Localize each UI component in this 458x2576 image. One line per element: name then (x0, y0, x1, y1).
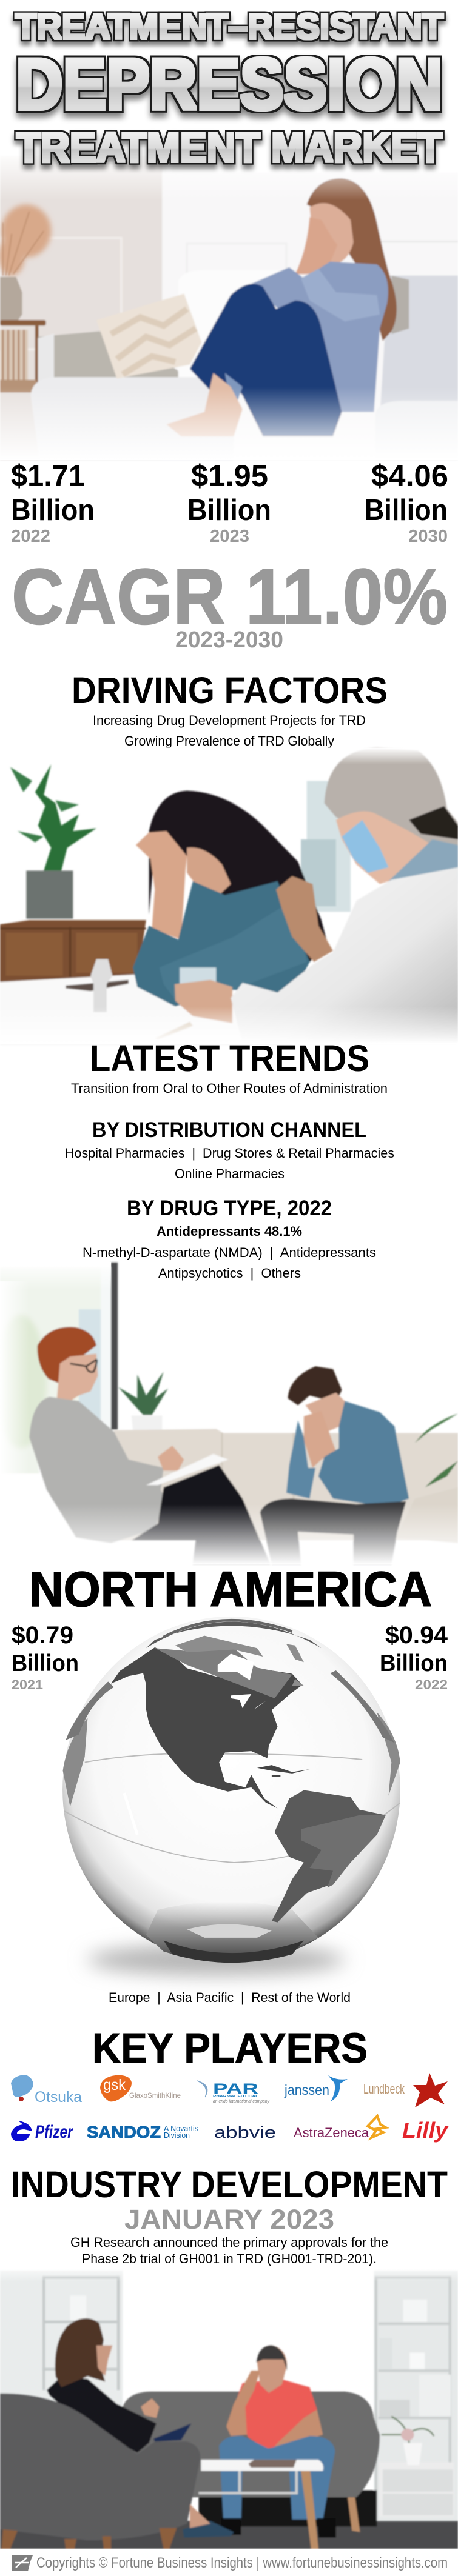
sofa (114, 1429, 458, 1540)
armchair (0, 2394, 200, 2540)
by drug type: Antipsychotics | Others (158, 1266, 301, 1281)
title: TREATMENT MARKET (16, 124, 442, 171)
sofa (38, 331, 181, 390)
by distribution channel (65, 1118, 394, 1181)
photo: therapy session with man in red shirt (0, 2262, 458, 2549)
south america continent (272, 1790, 386, 1923)
industry development: Phase 2b trial of GH001 in TRD (GH001-TRD-201). (82, 2251, 377, 2266)
equator lines (64, 1753, 400, 1863)
north america stats 2021 (12, 1622, 79, 1692)
logo: lundbeck: Lundbeck (363, 2081, 405, 2097)
caribbean islands (257, 1765, 309, 1777)
globe (62, 1617, 400, 1975)
logo: janssen (284, 2075, 348, 2101)
stat 2023: Billion (187, 494, 271, 527)
logo: otsuka: Otsuka (35, 2089, 82, 2106)
driving factors: Increasing Drug Development Projects for TRD (93, 713, 366, 728)
stat 2022: $1.71 (11, 459, 85, 493)
photo: therapist with male patient on sofa (0, 1262, 458, 1565)
therapist (35, 1449, 175, 1549)
market value stats (11, 459, 448, 546)
logo: par (197, 2081, 270, 2104)
logo: red star (413, 2073, 448, 2107)
coffee table (201, 2460, 323, 2471)
industry development: GH Research announced the primary approvals for the (70, 2235, 388, 2250)
logo: janssen: janssen (284, 2082, 329, 2098)
driving factors: DRIVING FACTORS (72, 670, 388, 711)
key players heading: KEY PLAYERS (92, 2024, 368, 2072)
north america stats 2022: Billion (380, 1650, 448, 1677)
logo: gsk: gsk (103, 2077, 126, 2094)
latest trends (71, 1038, 388, 1096)
latest trends: LATEST TRENDS (90, 1038, 369, 1079)
globe shadow (87, 1944, 345, 1975)
footer logo (12, 2555, 33, 2571)
logo: sandoz: A Novartis (164, 2124, 198, 2133)
stat 2022: 2022 (11, 527, 50, 546)
stat 2023: 2023 (210, 527, 249, 546)
by drug type: BY DRUG TYPE, 2022 (127, 1196, 332, 1220)
by distribution channel: BY DISTRIBUTION CHANNEL (92, 1118, 366, 1142)
by distribution channel: Online Pharmacies (175, 1166, 285, 1181)
stat 2030: 2030 (408, 527, 448, 546)
patient (149, 791, 327, 962)
logo: gsk: GlaxoSmithKline (129, 2091, 181, 2100)
industry development: JANUARY 2023 (124, 2204, 334, 2235)
logos (11, 2073, 449, 2143)
north america stats 2022: 2022 (415, 1677, 448, 1692)
industry development (11, 2164, 448, 2266)
by drug type (83, 1196, 376, 1281)
sofa (123, 2392, 380, 2497)
logo: lilly: Lilly (402, 2118, 449, 2143)
photo: woman sitting on sofa covering face (0, 150, 458, 460)
north america stats 2022: $0.94 (385, 1622, 448, 1649)
woman (307, 178, 397, 341)
stat 2030: $4.06 (371, 459, 448, 493)
by drug type: N-methyl-D-aspartate (NMDA) | Antidepressants (83, 1245, 376, 1260)
logo: sandoz (87, 2123, 198, 2141)
driving factors: Growing Prevalence of TRD Globally (124, 733, 334, 749)
logo: par: PHARMACEUTICAL (213, 2095, 258, 2098)
globe base (146, 1901, 318, 1960)
logo: pfizer: Pfizer (35, 2122, 74, 2142)
north america stats 2021: $0.79 (12, 1622, 73, 1649)
logo: par: PAR (213, 2081, 258, 2097)
therapist (47, 2376, 157, 2453)
logo: sandoz: Division (164, 2131, 190, 2140)
stat 2022: Billion (11, 494, 95, 527)
stat 2023: $1.95 (191, 459, 268, 493)
north america stats 2021: Billion (12, 1650, 79, 1677)
CAGR: 2023-2030 (175, 627, 283, 653)
table (0, 975, 292, 1046)
footer (0, 2549, 458, 2576)
hudson bay and great lakes (218, 1653, 266, 1709)
male patient (288, 1366, 342, 1405)
by distribution channel: Hospital Pharmacies | Drug Stores & Retail Pharmacies (65, 1146, 394, 1161)
wall plant (118, 1372, 168, 1415)
arctic islands (175, 1636, 304, 1686)
photo: doctor comforting patient (0, 747, 458, 1046)
dried flowers (0, 205, 51, 276)
driving factors (72, 670, 388, 749)
logo: sandoz: SANDOZ (87, 2123, 161, 2141)
north america stats 2022 (380, 1622, 448, 1692)
title (15, 7, 443, 171)
doctor (325, 747, 458, 901)
logo: astrazeneca (294, 2116, 386, 2140)
dresser (0, 920, 146, 982)
logo: gsk (100, 2075, 181, 2101)
logo: astrazeneca: AstraZeneca (294, 2125, 369, 2140)
dresser (379, 2463, 454, 2517)
shelves (42, 2276, 118, 2390)
other regions: Europe | Asia Pacific | Rest of the World (109, 1990, 351, 2005)
stat 2030: Billion (365, 494, 448, 527)
stat 2023 (187, 459, 271, 546)
title: TREATMENT–RESISTANT (15, 7, 443, 47)
by drug type: Antidepressants 48.1% (157, 1224, 302, 1239)
stat 2030 (365, 459, 448, 546)
north america continent (111, 1647, 302, 1808)
floor (0, 2521, 458, 2549)
north america heading: NORTH AMERICA (29, 1562, 432, 1617)
stat 2022 (11, 459, 95, 546)
logo: par: an endo international company (213, 2098, 270, 2104)
north america stats 2021: 2021 (12, 1677, 43, 1692)
plant (35, 764, 96, 870)
orchid (403, 2443, 422, 2465)
logo: pfizer (11, 2121, 74, 2142)
latest trends: Transition from Oral to Other Routes of Administration (71, 1081, 388, 1096)
logo: abbvie: abbvie (214, 2123, 276, 2141)
logo: otsuka (11, 2075, 82, 2106)
man (234, 2379, 317, 2449)
